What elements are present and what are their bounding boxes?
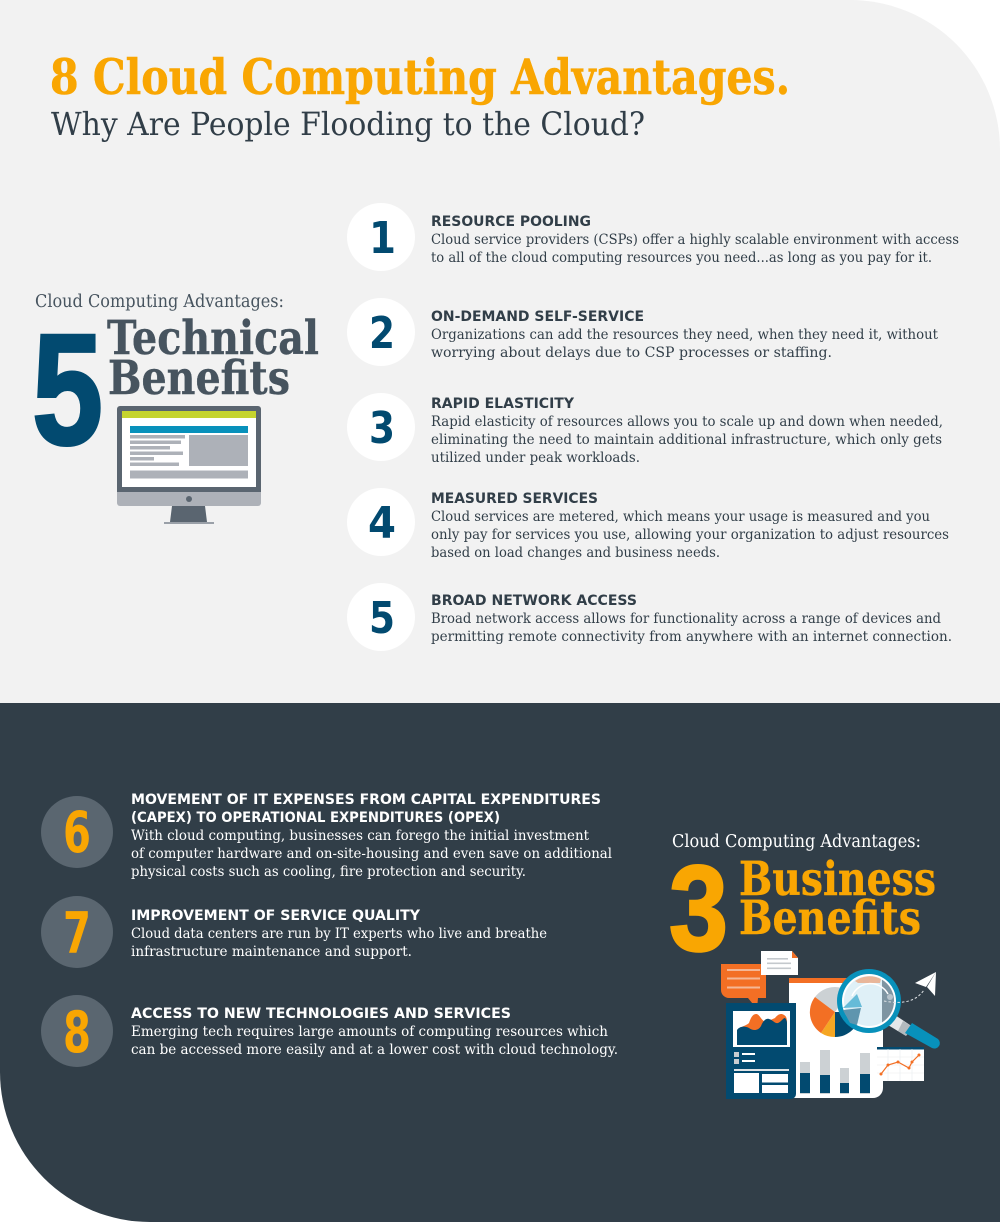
heading: 5 technical benefits: Technical [107, 311, 319, 366]
item 3: rapid elasticity: 3 [369, 403, 395, 454]
report page with charts [789, 978, 883, 1098]
item 3: rapid elasticity: RAPID ELASTICITY [431, 396, 575, 412]
panel: dark bottom section [0, 703, 1000, 1222]
item 7: improvement of service quality: IMPROVEMENT OF SERVICE QUALITY [131, 908, 421, 924]
item 4: measured services: 4 [368, 498, 396, 549]
item 4: measured services: MEASURED SERVICES [431, 491, 598, 507]
item 8: access to new technologies [41, 995, 618, 1067]
item 4: measured services: based on load changes and business needs. [431, 545, 720, 561]
item 7: improvement of service quality: Cloud data centers are run by IT experts who live and breathe [131, 926, 547, 942]
item 2: on-demand self-service: 2 [369, 308, 395, 359]
blue tablet [726, 1003, 796, 1099]
item 5: broad network access: permitting remote connectivity from anywhere with an internet connection. [431, 629, 952, 645]
item 1: resource pooling: 1 [369, 213, 396, 264]
heading: 3 business benefits [669, 832, 936, 976]
item 1: resource pooling: Cloud service providers (CSPs) offer a highly scalable environment with access [431, 232, 959, 248]
item 1: resource pooling [347, 203, 959, 271]
title: 8 Cloud Computing Advantages. [50, 48, 790, 106]
heading: 5 technical benefits: 5 [32, 302, 103, 478]
icon: analytics illustration [721, 951, 940, 1099]
item 5: broad network access [347, 583, 952, 651]
item 6: capex to opex: (CAPEX) TO OPERATIONAL EXPENDITURES (OPEX) [131, 810, 500, 826]
item 8: access to new technologies: can be accessed more easily and at a lower cost with cloud technology. [131, 1042, 618, 1058]
subtitle: Why Are People Flooding to the Cloud? [51, 105, 645, 143]
item 5: broad network access: 5 [369, 593, 395, 644]
item 3: rapid elasticity: utilized under peak workloads. [431, 450, 640, 466]
item 4: measured services: only pay for services you use, allowing your organization to adjust resources [431, 527, 949, 543]
item 7: improvement of service quality [41, 896, 547, 968]
item 5: broad network access: Broad network access allows for functionality across a range of devices and [431, 611, 941, 627]
item 6: capex to opex: of computer hardware and on-site-housing and even save on additional [131, 846, 612, 862]
paper plane with dashed trail [884, 972, 936, 1002]
item 2: on-demand self-service: ON-DEMAND SELF-SERVICE [431, 309, 644, 325]
item 6: capex to opex: MOVEMENT OF IT EXPENSES FROM CAPITAL EXPENDITURES [131, 792, 601, 808]
small line chart [877, 1047, 924, 1081]
item 2: on-demand self-service: worrying about delays due to CSP processes or staffing. [431, 345, 832, 361]
heading: 3 business benefits: Cloud Computing Advantages: [672, 832, 921, 852]
item 7: improvement of service quality: infrastructure maintenance and support. [131, 944, 412, 960]
heading: 5 technical benefits: Benefits [108, 351, 290, 406]
item 6: capex to opex: With cloud computing, businesses can forego the initial investment [131, 828, 589, 844]
heading: 5 technical benefits [32, 292, 319, 478]
item 6: capex to opex: physical costs such as cooling, fire protection and security. [131, 864, 526, 880]
heading: 3 business benefits: Business [739, 852, 936, 907]
item 4: measured services: Cloud services are metered, which means your usage is measured and you [431, 509, 930, 525]
heading: 5 technical benefits: Cloud Computing Advantages: [35, 292, 284, 312]
item 8: access to new technologies: Emerging tech requires large amounts of computing resources which [131, 1024, 608, 1040]
item 8: access to new technologies: 8 [63, 1000, 91, 1066]
panel: light top section [0, 0, 1000, 703]
item 3: rapid elasticity [347, 393, 943, 466]
item 2: on-demand self-service: Organizations can add the resources they need, when they need it, without [431, 327, 938, 343]
item 1: resource pooling: RESOURCE POOLING [431, 214, 591, 230]
magnifying glass [837, 969, 940, 1049]
item 6: capex to opex [41, 792, 612, 880]
item 5: broad network access: BROAD NETWORK ACCESS [431, 593, 637, 609]
item 3: rapid elasticity: Rapid elasticity of resources allows you to scale up and down when needed, [431, 414, 943, 430]
item 8: access to new technologies: ACCESS TO NEW TECHNOLOGIES AND SERVICES [131, 1006, 511, 1022]
item 6: capex to opex: 6 [63, 800, 91, 866]
heading: 3 business benefits: Benefits [739, 891, 921, 946]
item 7: improvement of service quality: 7 [63, 901, 91, 967]
item 1: resource pooling: to all of the cloud computing resources you need...as long as you pay for it. [431, 250, 932, 266]
note card [761, 951, 798, 975]
item 4: measured services [347, 488, 949, 561]
speech bubble [721, 964, 766, 1009]
item 2: on-demand self-service [347, 298, 938, 366]
heading: 3 business benefits: 3 [669, 840, 728, 976]
item 3: rapid elasticity: eliminating the need to maintain additional infrastructure, which only gets [431, 432, 942, 448]
icon: desktop monitor [117, 406, 261, 524]
